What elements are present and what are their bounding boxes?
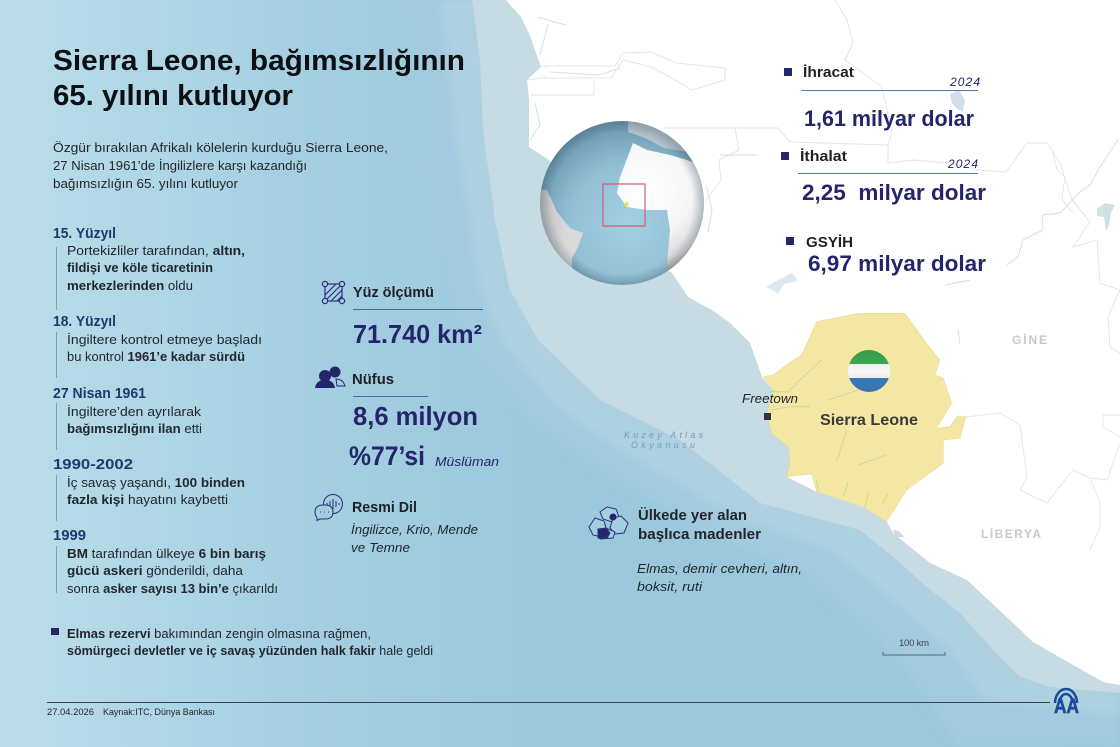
source line: Kaynak:ITC, Dünya Bankası	[103, 707, 215, 717]
map: borders and rivers	[527, 0, 1120, 550]
timeline: 15. Yüzyıl: merkezlerinden oldu	[67, 278, 193, 293]
footer rule	[47, 702, 1050, 703]
timeline: 1999: sonra asker sayısı 13 bin’e çıkarıldı	[67, 581, 278, 596]
minerals panel: Ülkede yer alan	[638, 507, 747, 524]
stat: İthalat: İthalat	[800, 148, 847, 165]
stat: Nüfus	[315, 366, 499, 471]
stat: İthalat: 2024	[947, 157, 978, 171]
timeline: 15. Yüzyıl	[53, 225, 245, 310]
stat: Resmi Dil	[315, 494, 478, 555]
stat: İhracat: 2024	[949, 75, 980, 89]
label: ocean: Okyanusu	[631, 440, 695, 450]
timeline: 1999: gücü askeri gönderildi, daha	[67, 563, 244, 578]
stat: İhracat: İhracat	[803, 64, 854, 81]
icon: people	[315, 366, 345, 388]
map: coastal shelf	[472, 0, 1120, 693]
stat: Resmi Dil: İngilizce, Krio, Mende	[351, 522, 478, 537]
stat: Resmi Dil: ve Temne	[351, 540, 410, 555]
stat: Nüfus: 8,6 milyon	[353, 401, 478, 431]
source line	[47, 707, 215, 717]
title: Sierra Leone, bağımsızlığının	[53, 45, 465, 77]
logo: AA: AA	[1054, 695, 1079, 718]
timeline: 15. Yüzyıl: fildişi ve köle ticaretinin	[67, 260, 213, 275]
timeline: 1990-2002: 1990-2002	[53, 456, 133, 473]
stat: GSYİH: GSYİH	[806, 234, 853, 251]
intro text: bağımsızlığın 65. yılını kutluyor	[53, 176, 239, 191]
icon: area	[322, 281, 345, 304]
stat: GSYİH	[786, 234, 986, 276]
timeline: 1990-2002: fazla kişi hayatını kaybetti	[67, 492, 228, 507]
footnote	[51, 626, 433, 658]
stat: İthalat: 2,25 milyar dolar	[802, 180, 986, 205]
label: Liberya: LİBERYA	[981, 526, 1041, 541]
stat: İhracat: 1,61 milyar dolar	[804, 106, 974, 131]
icon: Sierra Leone flag	[848, 350, 890, 392]
timeline: 18. Yüzyıl: 18. Yüzyıl	[53, 313, 116, 330]
stat: İhracat	[784, 64, 980, 131]
icon: speech bubbles	[315, 494, 342, 520]
icon: rocks	[589, 507, 628, 539]
timeline: 1999: 1999	[53, 527, 86, 544]
label: ocean	[624, 430, 704, 450]
timeline: 15. Yüzyıl: 15. Yüzyıl	[53, 225, 116, 242]
minerals panel: başlıca madenler	[638, 527, 761, 543]
scale bar: 100 km	[899, 638, 929, 649]
timeline: 18. Yüzyıl: İngiltere kontrol etmeye başladı	[67, 332, 262, 347]
label: Freetown	[742, 392, 798, 420]
minerals panel	[589, 507, 802, 594]
minerals panel: boksit, ruti	[637, 579, 703, 594]
timeline: 27 Nisan 1961: İngiltere’den ayrılarak	[67, 404, 202, 419]
stat: GSYİH: 6,97 milyar dolar	[808, 251, 986, 276]
stat: İthalat	[781, 148, 986, 205]
intro text: Özgür bırakılan Afrikalı kölelerin kurduğu Sierra Leone,	[53, 140, 388, 155]
map: land	[506, 0, 1120, 685]
timeline: 27 Nisan 1961: bağımsızlığını ilan etti	[67, 421, 202, 436]
timeline: 27 Nisan 1961	[53, 385, 202, 450]
label: Freetown: Freetown	[742, 392, 798, 406]
timeline: 18. Yüzyıl	[53, 313, 262, 378]
globe inset	[540, 121, 704, 285]
stat: Yüz ölçümü: 71.740 km²	[353, 319, 482, 349]
stat: Nüfus: Müslüman	[435, 454, 499, 469]
map: Sierra Leone	[763, 313, 966, 522]
label: ocean: Kuzey Atlas	[624, 430, 704, 440]
stat: Yüz ölçümü: Yüz ölçümü	[353, 285, 434, 301]
stat: Yüz ölçümü	[322, 281, 483, 349]
timeline: 27 Nisan 1961: 27 Nisan 1961	[53, 385, 146, 402]
footnote: sömürgeci devletler ve iç savaş yüzünden halk fakir hale geldi	[67, 643, 433, 658]
stat: Nüfus: %77’si	[349, 441, 425, 471]
title	[53, 45, 465, 112]
stat: Nüfus: Nüfus	[352, 372, 394, 388]
title: 65. yılını kutluyor	[53, 80, 293, 112]
intro text	[53, 140, 388, 191]
footnote: Elmas rezervi bakımından zengin olmasına rağmen,	[67, 626, 371, 641]
source line: 27.04.2026	[47, 707, 94, 717]
timeline: 18. Yüzyıl: bu kontrol 1961’e kadar sürdü	[67, 349, 245, 364]
intro text: 27 Nisan 1961’de İngilizlere karşı kazandığı	[53, 158, 307, 173]
timeline: 15. Yüzyıl: Portekizliler tarafından, altın,	[67, 243, 245, 258]
timeline: 1990-2002: İç savaş yaşandı, 100 binden	[67, 475, 245, 490]
minerals panel: Elmas, demir cevheri, altın,	[637, 561, 802, 576]
scale bar	[883, 638, 945, 655]
timeline: 1999	[53, 527, 278, 596]
stat: Resmi Dil: Resmi Dil	[352, 500, 417, 516]
timeline: 1990-2002	[53, 456, 245, 521]
logo: AA	[1054, 689, 1079, 718]
label: Sierra Leone: Sierra Leone	[820, 412, 918, 429]
label: Gine: GİNE	[1012, 332, 1047, 347]
timeline: 1999: BM tarafından ülkeye 6 bin barış	[67, 546, 266, 561]
